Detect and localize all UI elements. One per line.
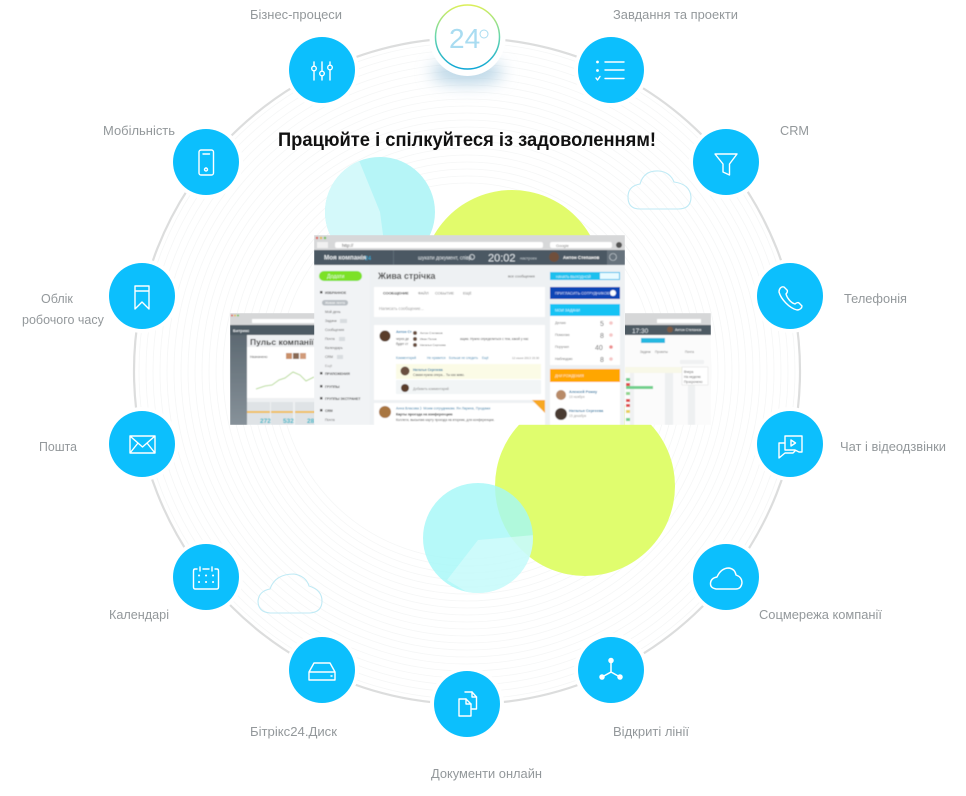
right screenshot: gantt tasks: Антон Степанов	[675, 328, 701, 332]
composer box: Написать сообщение...	[379, 306, 424, 311]
main screenshot: activity stream	[314, 235, 625, 425]
left screenshot: company pulse: 532	[283, 418, 294, 425]
right screenshot: gantt tasks: Просрочено	[684, 380, 703, 384]
right column widgets: 8	[600, 333, 604, 340]
right column widgets: Наблюдаю	[555, 357, 573, 361]
right column widgets: 5	[600, 321, 604, 328]
right column widgets: Делаю	[555, 321, 566, 325]
dark header: Антон Степанов	[563, 255, 599, 260]
right column widgets: ДНИ РОЖДЕНИЯ	[555, 374, 584, 378]
left screenshot: company pulse: Битрикс	[233, 328, 250, 333]
circle: CRM	[689, 125, 763, 199]
browser chrome: http://	[342, 243, 354, 248]
icon: bookmark	[135, 286, 149, 309]
composer box: СООБЩЕНИЕ	[383, 292, 409, 296]
sidebar: Живая лента	[325, 301, 345, 305]
icon: calendar	[194, 567, 218, 589]
icon: smartphone	[199, 150, 214, 175]
sidebar	[318, 270, 362, 422]
sidebar: ПРИЛОЖЕНИЯ	[325, 372, 350, 376]
right screenshot: gantt tasks: Почта	[685, 350, 694, 354]
sidebar: Почта	[325, 418, 335, 422]
dark header: шукати документ, співр.	[418, 256, 473, 262]
circle: company social network	[689, 540, 763, 614]
left screenshot: company pulse: 28	[307, 418, 315, 425]
circle: Bitrix24 drive	[285, 633, 359, 707]
sidebar: Сообщения	[325, 328, 344, 332]
post two: Карты проезда на конференцию	[396, 412, 453, 416]
circle: business processes	[285, 33, 359, 107]
label: online documents: Документи онлайн	[431, 767, 542, 781]
post one: Наталья Сергеева	[413, 368, 443, 372]
right screenshot: gantt tasks: Вчера	[684, 370, 693, 374]
right column widgets	[550, 272, 620, 425]
icon: funnel	[715, 154, 737, 175]
label: chat and video calls: Чат і відеодзвінки	[840, 440, 946, 454]
sidebar: Задачи	[325, 319, 337, 323]
label: calendars: Календарі	[109, 608, 169, 622]
label: open lines: Відкриті лінії	[613, 725, 690, 739]
post one: Наталья Сергеева	[420, 343, 446, 347]
label: mobility: Мобільність	[103, 124, 175, 138]
pale blue pie top	[325, 157, 435, 236]
right column widgets: МОИ ЗАДАЧИ	[555, 308, 580, 312]
right column widgets: 10 ноября	[569, 395, 585, 399]
icon: checklist	[596, 61, 624, 80]
post one: Антон Степанов	[420, 331, 443, 335]
post one: Добавить комментарий	[413, 387, 449, 391]
sidebar: ГРУППЫ ЭКСТРАНЕТ	[325, 397, 361, 401]
label: business processes: Бізнес-процеси	[250, 8, 342, 22]
sidebar: Мой день	[325, 310, 341, 314]
right screenshot: gantt tasks: Проекты	[655, 350, 668, 354]
circle: tasks and projects	[574, 33, 648, 107]
circle: work time	[105, 259, 179, 333]
post two	[374, 400, 545, 425]
post one: через де	[396, 337, 409, 341]
icon: video chat bubbles	[779, 436, 802, 458]
composer box: ФАЙЛ	[418, 292, 429, 296]
pale blue pie bottom	[423, 483, 533, 593]
post one: Не нравится	[427, 356, 446, 360]
label: telephony: Телефонія	[844, 292, 907, 306]
post one: Самая нужна опера... Ты как живо.	[413, 373, 465, 377]
icon: hub nodes	[600, 658, 622, 679]
label: work time tracking: робочого часу	[22, 313, 105, 327]
icon: documents	[459, 692, 476, 716]
label: tasks and projects: Завдання та проекти	[613, 8, 738, 22]
post one: 12 июня 2013 15:30	[512, 356, 540, 360]
label: CRM: CRM	[780, 124, 809, 138]
dark header: 24	[365, 256, 371, 262]
dark header: 20:02	[488, 252, 516, 264]
sidebar: ГРУППЫ	[325, 385, 340, 389]
post one: Комментарий	[396, 356, 416, 360]
sidebar: Почта	[325, 337, 335, 341]
circle: chat and video calls	[753, 407, 827, 481]
right screenshot: gantt tasks	[620, 313, 711, 425]
browser chrome	[314, 235, 625, 250]
icon: hard drive	[309, 663, 335, 680]
sidebar: ИЗБРАННОЕ	[325, 291, 347, 295]
icon: phone handset	[779, 287, 802, 310]
right column widgets: 8	[600, 357, 604, 364]
post one: Антон Ст	[396, 330, 412, 334]
circle: telephony	[753, 259, 827, 333]
post one: Иван Попов	[420, 337, 437, 341]
sidebar: Додати	[327, 274, 345, 280]
post one: Ещё	[482, 356, 489, 360]
main screenshot: activity stream: все сообщения	[508, 274, 535, 278]
lime circle bottom	[495, 396, 675, 576]
post one: Больше не следить	[449, 356, 478, 360]
label: company social network: Соцмережа компанії	[759, 608, 883, 622]
post one: будет ст	[396, 342, 409, 346]
label: mail: Пошта	[39, 440, 77, 454]
icon: envelope	[130, 436, 155, 453]
cloud outline left	[258, 574, 322, 613]
label: Bitrix24 drive: Бітрікс24.Диск	[250, 725, 338, 739]
right screenshot: gantt tasks: Задачи	[640, 350, 651, 354]
browser chrome: Google	[556, 243, 570, 248]
feed heading: Жива стрічка	[377, 271, 436, 281]
right column widgets: 40	[595, 345, 603, 352]
circle: online documents	[430, 667, 504, 741]
circle: mobility	[169, 125, 243, 199]
right column widgets: Помогаю	[555, 333, 570, 337]
composer box: СОБЫТИЕ	[435, 292, 455, 296]
dark header: настроек	[520, 256, 537, 260]
dark header: Моя компанія	[324, 254, 367, 262]
top 24 badge	[430, 0, 506, 84]
label: work time tracking: Облік	[41, 292, 73, 306]
sidebar: CRM	[325, 355, 333, 359]
cloud outline right	[628, 171, 691, 209]
right screenshot: gantt tasks: На неделю	[684, 375, 701, 379]
left screenshot: company pulse: Пульс компанії	[250, 337, 314, 347]
circle: calendars	[169, 540, 243, 614]
composer box	[374, 287, 545, 317]
right screenshot: gantt tasks: 17:30	[632, 328, 649, 335]
lime circle top	[422, 190, 602, 370]
outer ring	[134, 38, 800, 704]
right column widgets: НАЧАТЬ ВЫХОДНОЙ	[556, 275, 591, 279]
sidebar: Ещё	[325, 364, 332, 368]
circle: open lines	[574, 633, 648, 707]
left screenshot: company pulse: Назначено	[250, 355, 268, 359]
right column widgets: Алексей Рожку	[569, 390, 598, 394]
background concentric rings	[139, 43, 795, 699]
left screenshot: company pulse	[230, 313, 320, 425]
post one	[374, 325, 545, 400]
right column widgets: Наталья Сергеева	[569, 409, 604, 413]
right column widgets: ПРИГЛАСИТЬ СОТРУДНИКОВ	[555, 292, 610, 296]
dark header	[314, 250, 625, 265]
composer box: ЕЩЁ	[463, 292, 472, 296]
right column widgets: 15 декабря	[569, 414, 586, 418]
icon: sliders	[312, 62, 332, 80]
post two: Коллеги, высылаю карту проезда на вторник, для конференции.	[396, 418, 495, 422]
sidebar: Календарь	[325, 346, 343, 350]
icon: cloud	[710, 568, 742, 589]
sidebar: CRM	[325, 409, 333, 413]
title: Працюйте і спілкуйтеся із задоволенням!	[278, 130, 656, 151]
post one: ащим. Нужно определиться с тем, какой у нас	[460, 337, 529, 341]
top 24 badge: 24	[449, 23, 480, 54]
right column widgets: Поручил	[555, 345, 569, 349]
post two: Анна Власова 》Моим сотрудникам. Ян Ларина, Продажи	[396, 406, 490, 410]
circle: mail	[105, 407, 179, 481]
left screenshot: company pulse: 272	[260, 418, 271, 425]
